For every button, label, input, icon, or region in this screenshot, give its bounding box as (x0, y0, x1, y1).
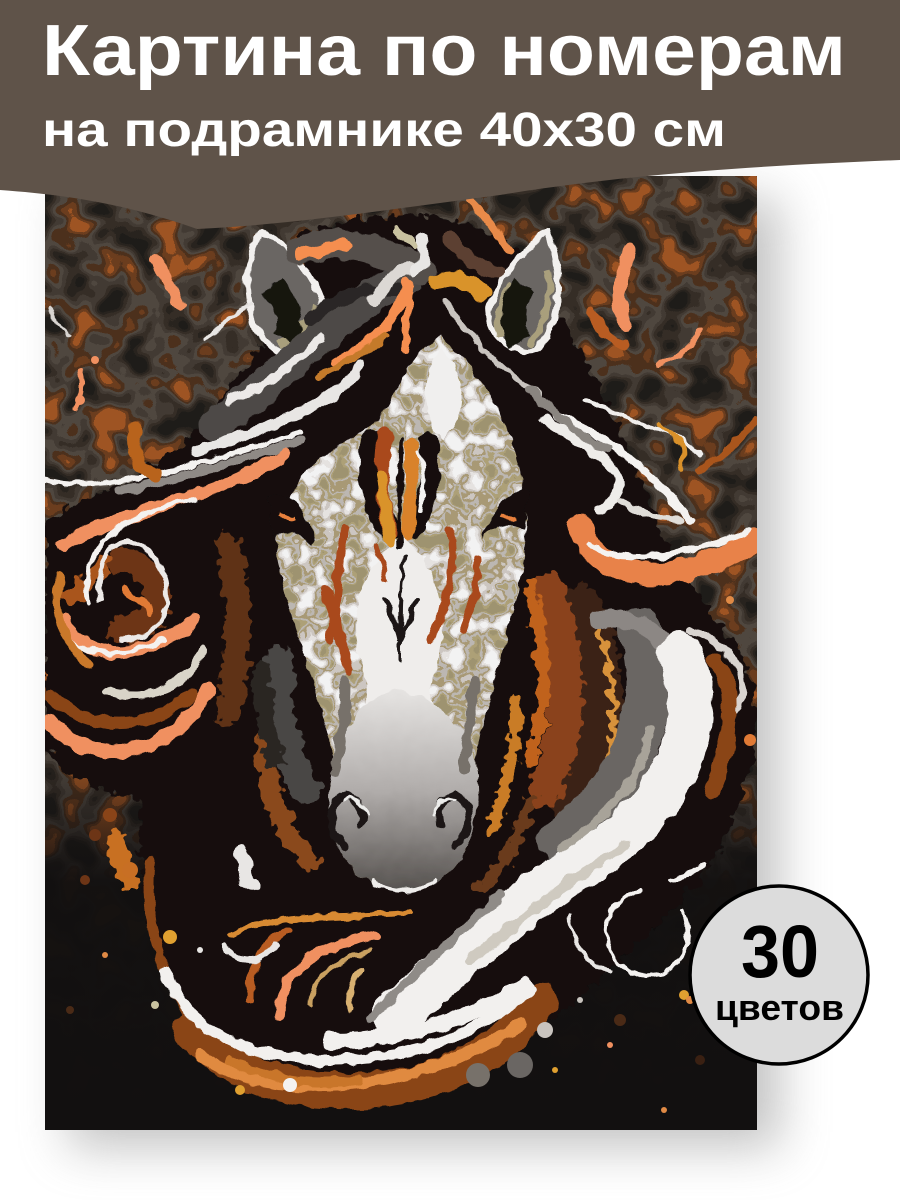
subtitle: на подрамнике 40х30 см (42, 104, 726, 157)
canvas shadow (68, 198, 780, 1148)
ears (247, 230, 558, 352)
bottom orange ribbon (149, 850, 540, 1090)
white flowing ribbon (370, 618, 690, 1020)
header banner (0, 0, 900, 229)
paint splatter dots (66, 356, 756, 1113)
badge: 30 colours: 30 (741, 910, 819, 993)
title: Картина по номерам (42, 11, 846, 91)
horse face (275, 334, 528, 889)
badge: 30 colours (690, 886, 868, 1064)
painting: horse portrait (45, 176, 757, 1130)
right mane strands (530, 390, 757, 975)
eye shadows (268, 490, 530, 548)
brown mane patches (70, 545, 614, 890)
painted background (45, 176, 757, 1130)
left mane strands (45, 305, 360, 751)
background flame accents (50, 250, 755, 475)
dark mane mass (45, 212, 757, 924)
forelock strands (215, 200, 540, 425)
face stripes and forehead mark (325, 432, 478, 890)
badge: 30 colours: цветов (715, 987, 844, 1028)
